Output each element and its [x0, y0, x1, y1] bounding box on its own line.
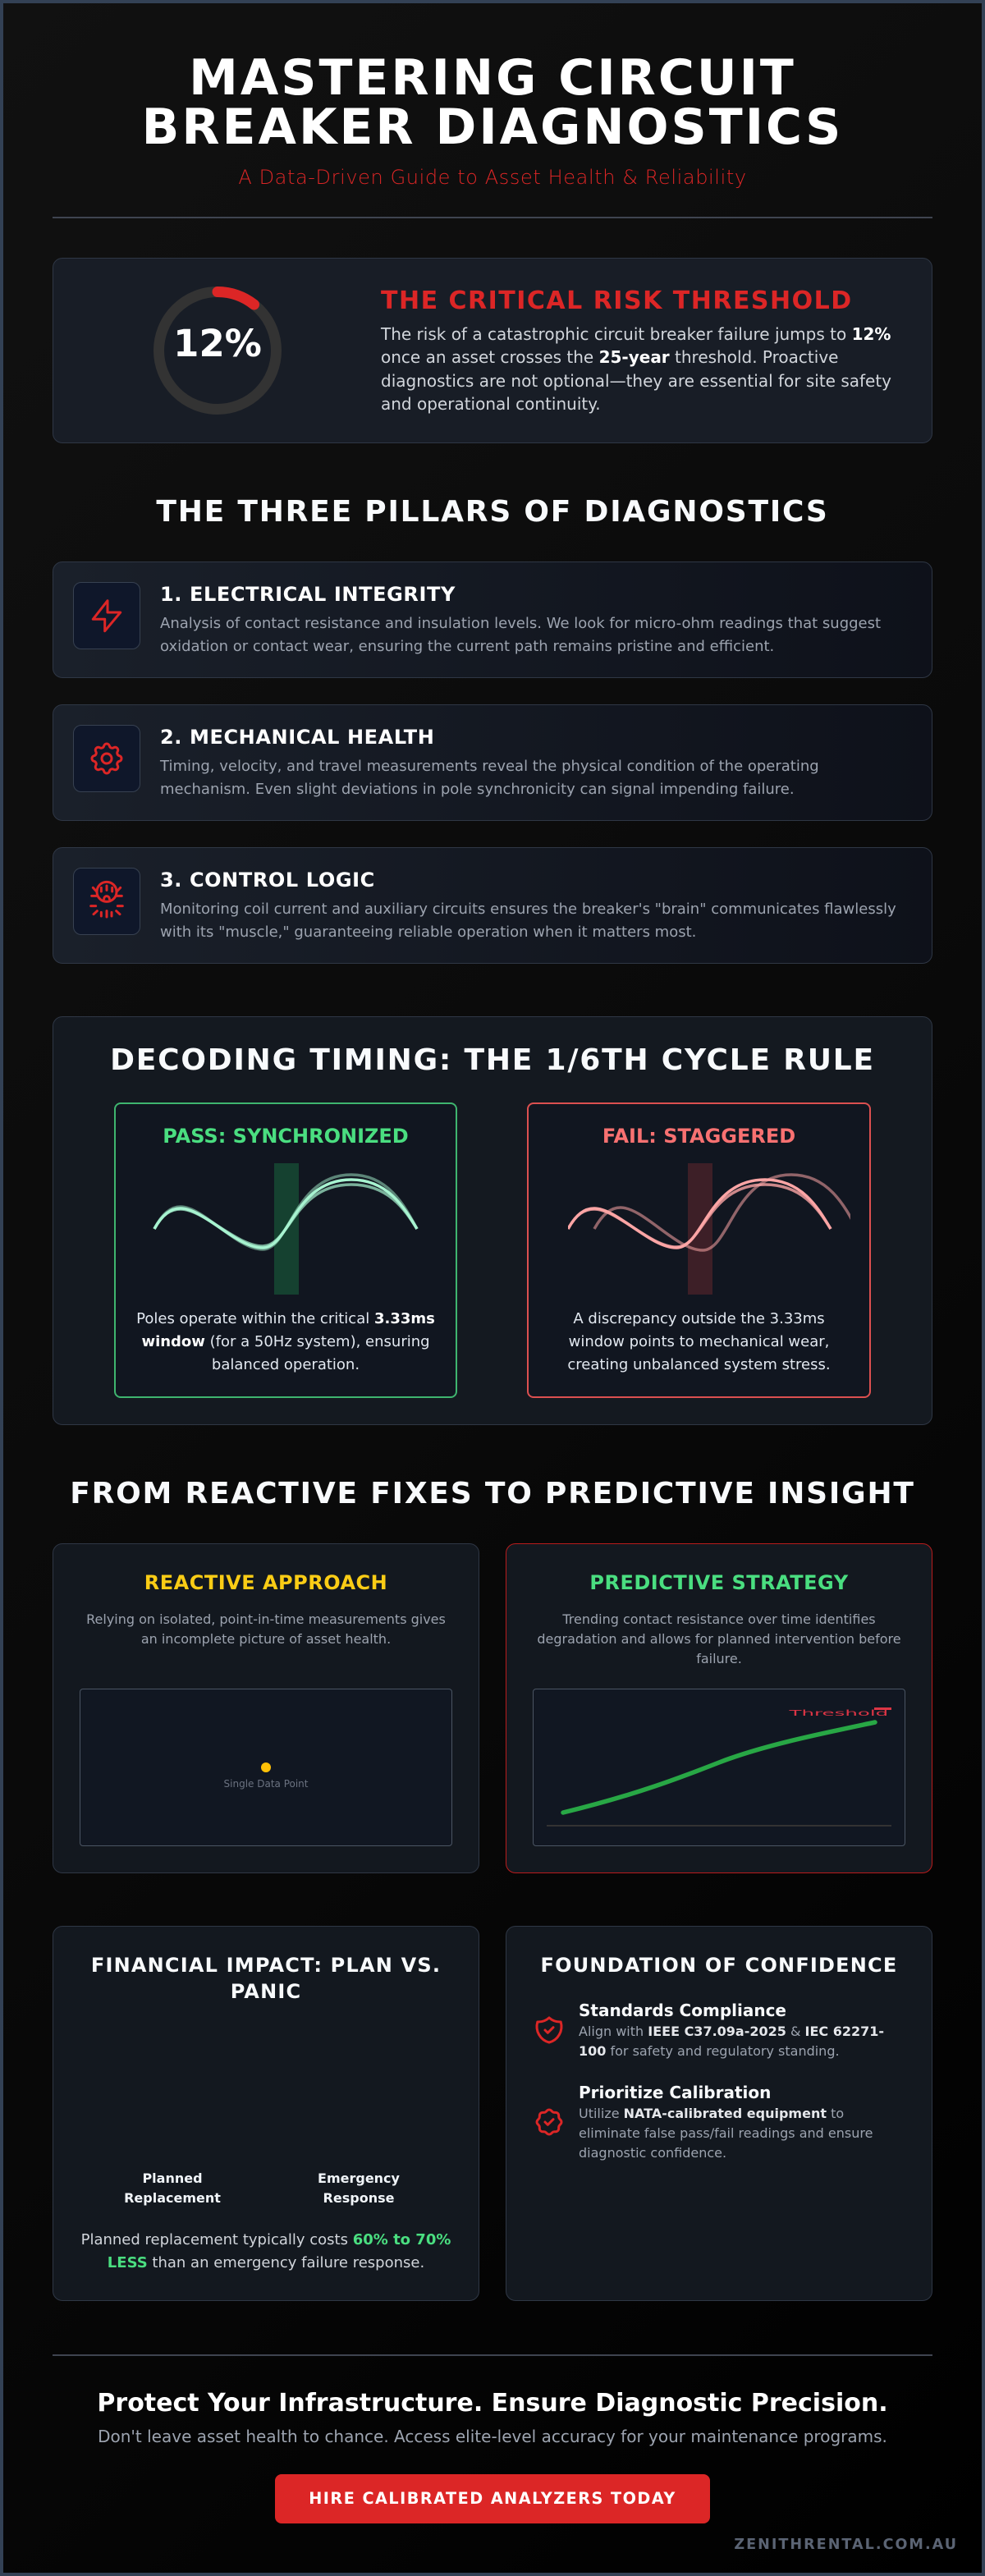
label: planned replacement: [124, 2170, 221, 2206]
predictive text: degradation and allows for planned intervention before: [537, 1631, 901, 1647]
chart: trend line with threshold: Threshold: [788, 1708, 888, 1718]
chart: synchronized waveforms: [153, 1163, 419, 1295]
button: HIRE CALIBRATED ANALYZERS TODAY: [309, 2489, 676, 2508]
chart: staggered waveforms: [568, 1163, 850, 1295]
financial text: LESS than an emergency failure response.: [108, 2254, 424, 2271]
fail text: [567, 1310, 831, 1373]
pass text: window (for a 50Hz system), ensuring: [141, 1333, 430, 1350]
icon box: gear: [73, 725, 140, 792]
icon: rosette check: [535, 2108, 563, 2136]
pass text: Poles operate within the critical 3.33ms: [136, 1310, 435, 1327]
title: MASTERING CIRCUIT: [189, 49, 796, 107]
chart: trend line with threshold: [547, 1707, 891, 1827]
pillar 3 heading: 3. CONTROL LOGIC: [160, 869, 375, 892]
predictive text: Trending contact resistance over time identifies: [562, 1611, 876, 1627]
reactive text: [86, 1611, 446, 1647]
icon: gear: [90, 742, 123, 775]
panel: decoding timing: [53, 1016, 932, 1425]
pass text: balanced operation.: [212, 1356, 360, 1373]
panel: mechanical health: [53, 704, 932, 821]
icon: control brain: [89, 880, 124, 918]
label: planned replacement: Planned: [142, 2170, 203, 2186]
pillar 1 heading: 1. ELECTRICAL INTEGRITY: [160, 583, 456, 606]
panel: reactive approach: [53, 1543, 479, 1873]
brand wordmark: ZENITHRENTAL.COM.AU: [734, 2537, 958, 2553]
pillar 2 heading: 2. MECHANICAL HEALTH: [160, 726, 434, 749]
timing heading: DECODING TIMING: THE 1/6TH CYCLE RULE: [110, 1043, 875, 1077]
chart box: trend: [533, 1689, 905, 1846]
footer subtext: Don't leave asset health to chance. Access elite-level accuracy for your maintenance programs.: [98, 2427, 887, 2446]
pillar 1 text: [160, 615, 881, 655]
label: emergency response: [318, 2170, 400, 2206]
pillar 2 text: [159, 758, 819, 798]
data point: [261, 1762, 271, 1772]
calibration text: eliminate false pass/fail readings and ensure: [579, 2125, 873, 2141]
calibration text: [579, 2106, 873, 2161]
standards text: 100 for safety and regulatory standing.: [579, 2043, 840, 2059]
panel: electrical integrity: [53, 561, 932, 678]
icon: bolt: [92, 599, 121, 632]
calibration text: diagnostic confidence.: [579, 2145, 726, 2161]
risk heading: THE CRITICAL RISK THRESHOLD: [381, 286, 853, 315]
panel: predictive strategy: [506, 1543, 932, 1873]
footer heading: Protect Your Infrastructure. Ensure Diagnostic Precision.: [97, 2389, 888, 2418]
panel: financial impact: [53, 1926, 479, 2301]
panel: foundation of confidence: [506, 1926, 932, 2301]
risk text: diagnostics are not optional—they are essential for site safety: [381, 371, 891, 391]
calibration text: Utilize NATA-calibrated equipment to: [579, 2106, 844, 2121]
pillar 1 text: oxidation or contact wear, ensuring the current path remains pristine and efficient.: [160, 638, 774, 655]
pillar 2 text: mechanism. Even slight deviations in pole synchronicity can signal impending failure.: [160, 781, 795, 798]
fail text: A discrepancy outside the 3.33ms: [573, 1310, 825, 1327]
gauge value: 12%: [173, 322, 262, 365]
fail box: [527, 1102, 871, 1398]
heading: reactive to predictive: FROM REACTIVE FIXES TO PREDICTIVE INSIGHT: [70, 1477, 915, 1510]
pillar 3 text: with its "muscle," guaranteeing reliable operation when it matters most.: [160, 924, 696, 941]
reactive text: an incomplete picture of asset health.: [141, 1631, 391, 1647]
foundation heading: FOUNDATION OF CONFIDENCE: [541, 1954, 897, 1977]
pillar 2 text: Timing, velocity, and travel measurements reveal the physical condition of the operating: [160, 758, 819, 775]
predictive text: failure.: [696, 1651, 742, 1666]
pass heading: PASS: SYNCHRONIZED: [163, 1125, 409, 1148]
button: [275, 2474, 710, 2523]
financial text: [81, 2231, 451, 2271]
fail text: window points to mechanical wear,: [569, 1333, 829, 1350]
fail heading: FAIL: STAGGERED: [602, 1125, 795, 1148]
standards heading: Standards Compliance: [579, 2001, 786, 2020]
title: [142, 49, 843, 156]
icon box: bolt: [73, 582, 140, 649]
risk text: once an asset crosses the 25-year threshold. Proactive: [381, 347, 838, 367]
risk text: [381, 324, 891, 414]
chart: 12 percent gauge: [153, 286, 282, 415]
standards text: [579, 2024, 884, 2059]
label: emergency response: Emergency: [318, 2170, 400, 2186]
pillar 1 text: Analysis of contact resistance and insulation levels. We look for micro-ohm readings that suggest: [160, 615, 881, 632]
title: BREAKER DIAGNOSTICS: [142, 99, 843, 156]
reactive text: Relying on isolated, point-in-time measurements gives: [86, 1611, 446, 1627]
risk text: The risk of a catastrophic circuit breaker failure jumps to 12%: [381, 324, 891, 344]
financial text: Planned replacement typically costs 60% to 70%: [81, 2231, 451, 2248]
icon: shield check: [535, 2016, 563, 2044]
chart box: single data point: [80, 1689, 452, 1846]
data point label: Single Data Point: [224, 1778, 308, 1790]
calibration heading: Prioritize Calibration: [579, 2083, 771, 2102]
financial heading: FINANCIAL IMPACT: PLAN VS.: [91, 1954, 441, 1977]
standards text: Align with IEEE C37.09a-2025 & IEC 62271-: [579, 2024, 884, 2039]
financial heading: PANIC: [231, 1980, 301, 2003]
pillar 3 text: Monitoring coil current and auxiliary circuits ensures the breaker's "brain" communicates flawlessly: [160, 901, 896, 918]
reactive heading: REACTIVE APPROACH: [144, 1571, 387, 1594]
label: planned replacement: Replacement: [124, 2190, 221, 2206]
subtitle: A Data-Driven Guide to Asset Health & Reliability: [238, 166, 747, 189]
panel: critical risk threshold: [53, 258, 932, 443]
heading: three pillars: THE THREE PILLARS OF DIAGNOSTICS: [156, 495, 829, 529]
panel: control logic: [53, 847, 932, 964]
predictive text: [537, 1611, 901, 1666]
pass text: [136, 1310, 435, 1373]
label: emergency response: Response: [323, 2190, 394, 2206]
predictive heading: PREDICTIVE STRATEGY: [589, 1571, 849, 1594]
risk text: and operational continuity.: [381, 394, 601, 414]
icon box: control: [73, 868, 140, 935]
pass box: [114, 1102, 457, 1398]
pillar 3 text: [160, 901, 896, 941]
fail text: creating unbalanced system stress.: [567, 1356, 831, 1373]
financial heading: [91, 1954, 441, 2003]
